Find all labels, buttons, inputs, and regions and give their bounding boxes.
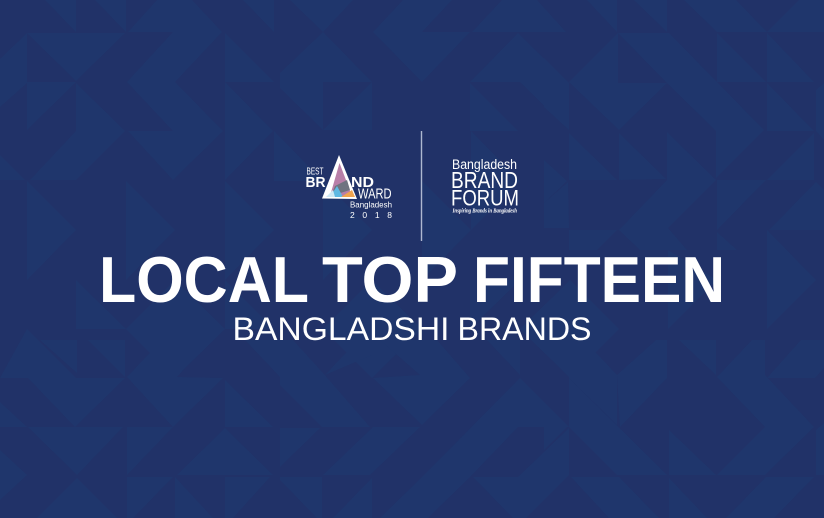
text: BR: BR [306,175,326,191]
subtitle: BANGLADSHI [232,311,450,347]
text: tagline: Inspiring Brands in Bangladesh [452,208,518,214]
logo: Best Brand Award Bangladesh 2018 [306,155,392,220]
subtitle [232,311,592,347]
title [99,243,725,316]
text: WARD: WARD [358,186,392,202]
text: ND: ND [351,175,374,191]
title: LOCAL [99,243,309,316]
title: FIFTEEN [473,243,725,316]
logo: Bangladesh Brand Forum [451,157,519,214]
icon: multicoloured triangle letter A [322,155,357,199]
divider between logos [421,131,422,241]
subtitle: BRANDS [458,311,592,347]
text: 2018: 2018 [350,210,392,220]
text: FORUM: FORUM [451,186,519,210]
text: Bangladesh: Bangladesh [452,157,517,172]
text: BEST: BEST [306,166,324,178]
text: Bangladesh: Bangladesh [350,200,392,210]
title: TOP [322,243,458,316]
text: BRAND: BRAND [451,167,518,193]
